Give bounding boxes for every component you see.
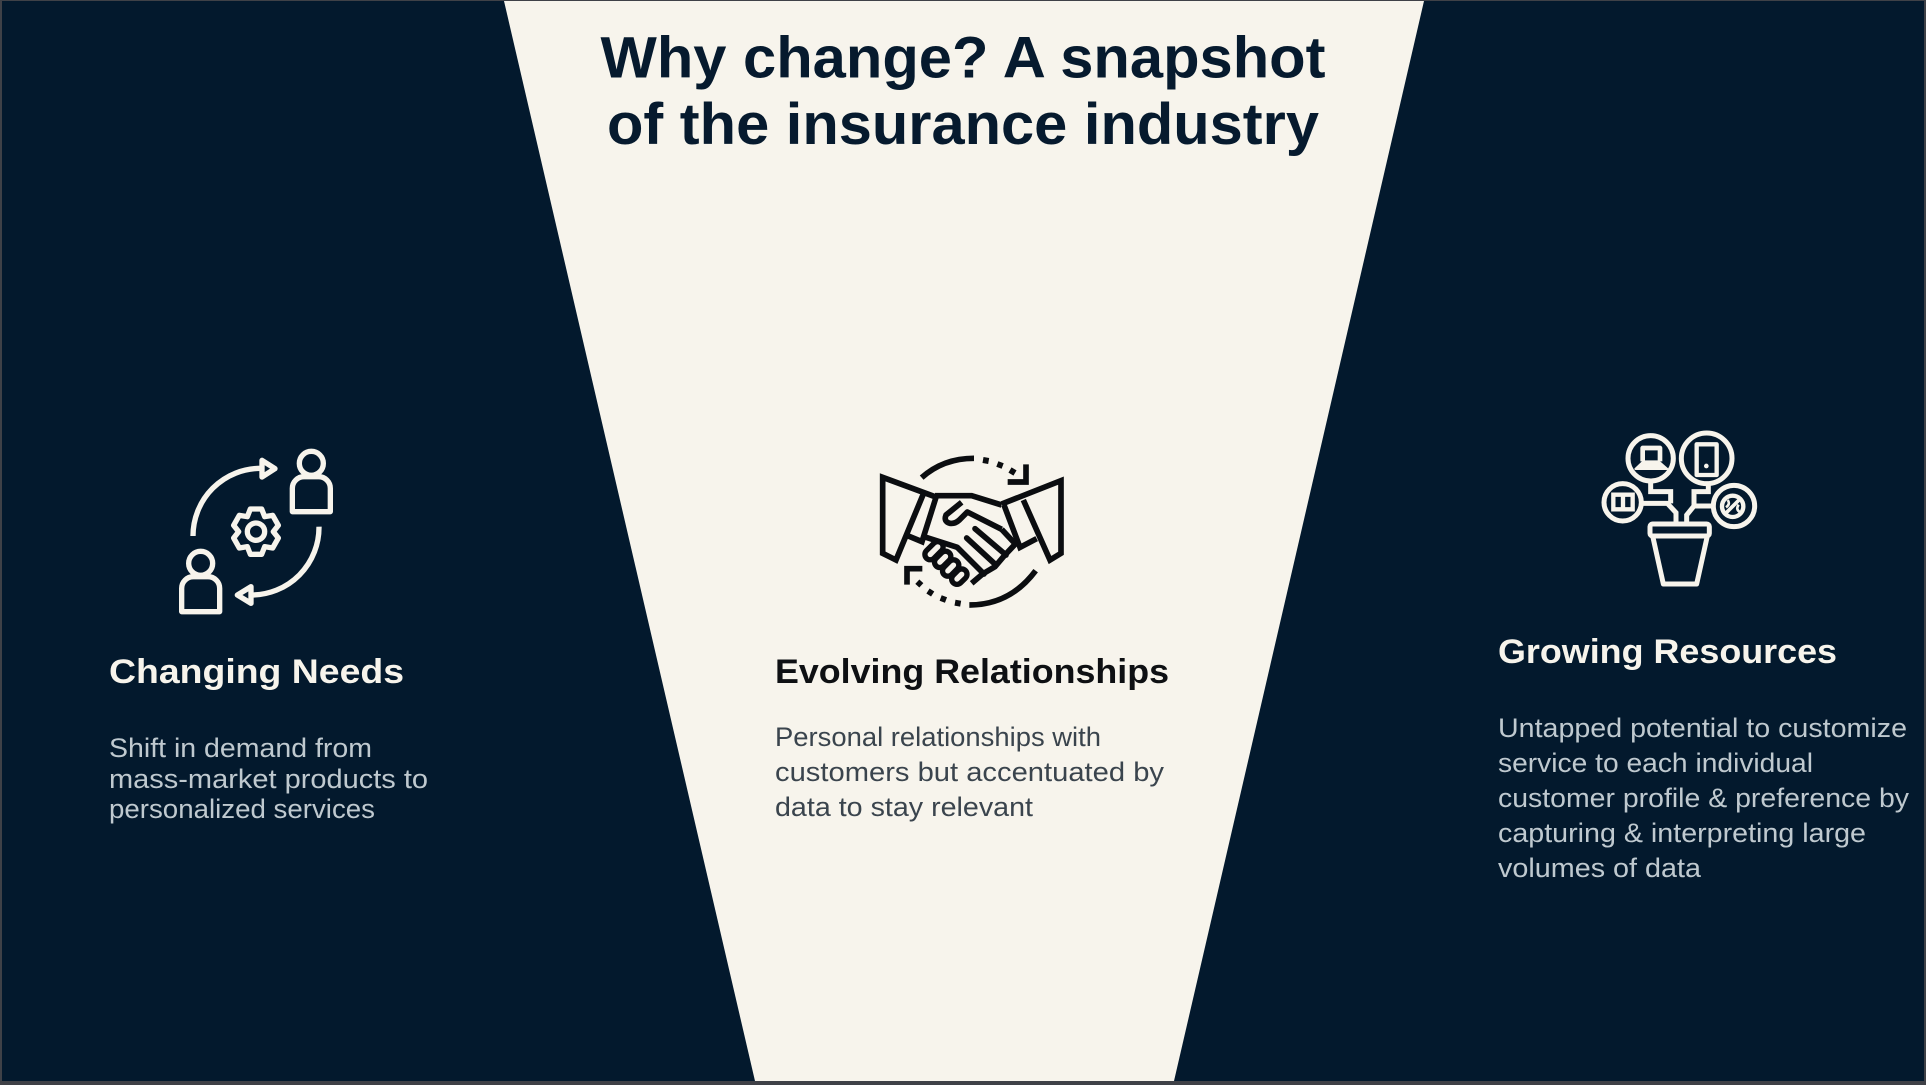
icon: plant with devices xyxy=(1604,433,1755,584)
body text: capturing & interpreting large xyxy=(1498,818,1866,848)
body text xyxy=(109,733,428,824)
panel: growing resources xyxy=(1498,433,1910,883)
heading: Evolving Relationships xyxy=(775,653,1169,691)
panel: changing needs xyxy=(109,451,428,824)
body text xyxy=(1498,713,1910,883)
body text: mass-market products to xyxy=(109,764,428,794)
body text: Personal relationships with xyxy=(775,722,1101,752)
body text xyxy=(775,722,1165,822)
title xyxy=(600,26,1326,157)
heading: Growing Resources xyxy=(1498,633,1837,671)
body text: data to stay relevant xyxy=(775,792,1034,822)
icon: handshake xyxy=(883,458,1061,605)
central funnel panel xyxy=(504,1,1424,1081)
title: of the insurance industry xyxy=(607,92,1319,157)
title: Why change? A snapshot xyxy=(600,26,1326,90)
heading: Changing Needs xyxy=(109,653,404,691)
body text: Shift in demand from xyxy=(109,733,372,763)
body text: customer profile & preference by xyxy=(1498,783,1910,813)
body text: personalized services xyxy=(109,794,375,824)
body text: Untapped potential to customize xyxy=(1498,713,1907,743)
panel: evolving relationships xyxy=(775,458,1169,822)
body text: volumes of data xyxy=(1498,853,1701,883)
body text: customers but accentuated by xyxy=(775,757,1165,787)
icon: people exchanging with gear xyxy=(182,451,330,612)
body text: service to each individual xyxy=(1498,748,1813,778)
